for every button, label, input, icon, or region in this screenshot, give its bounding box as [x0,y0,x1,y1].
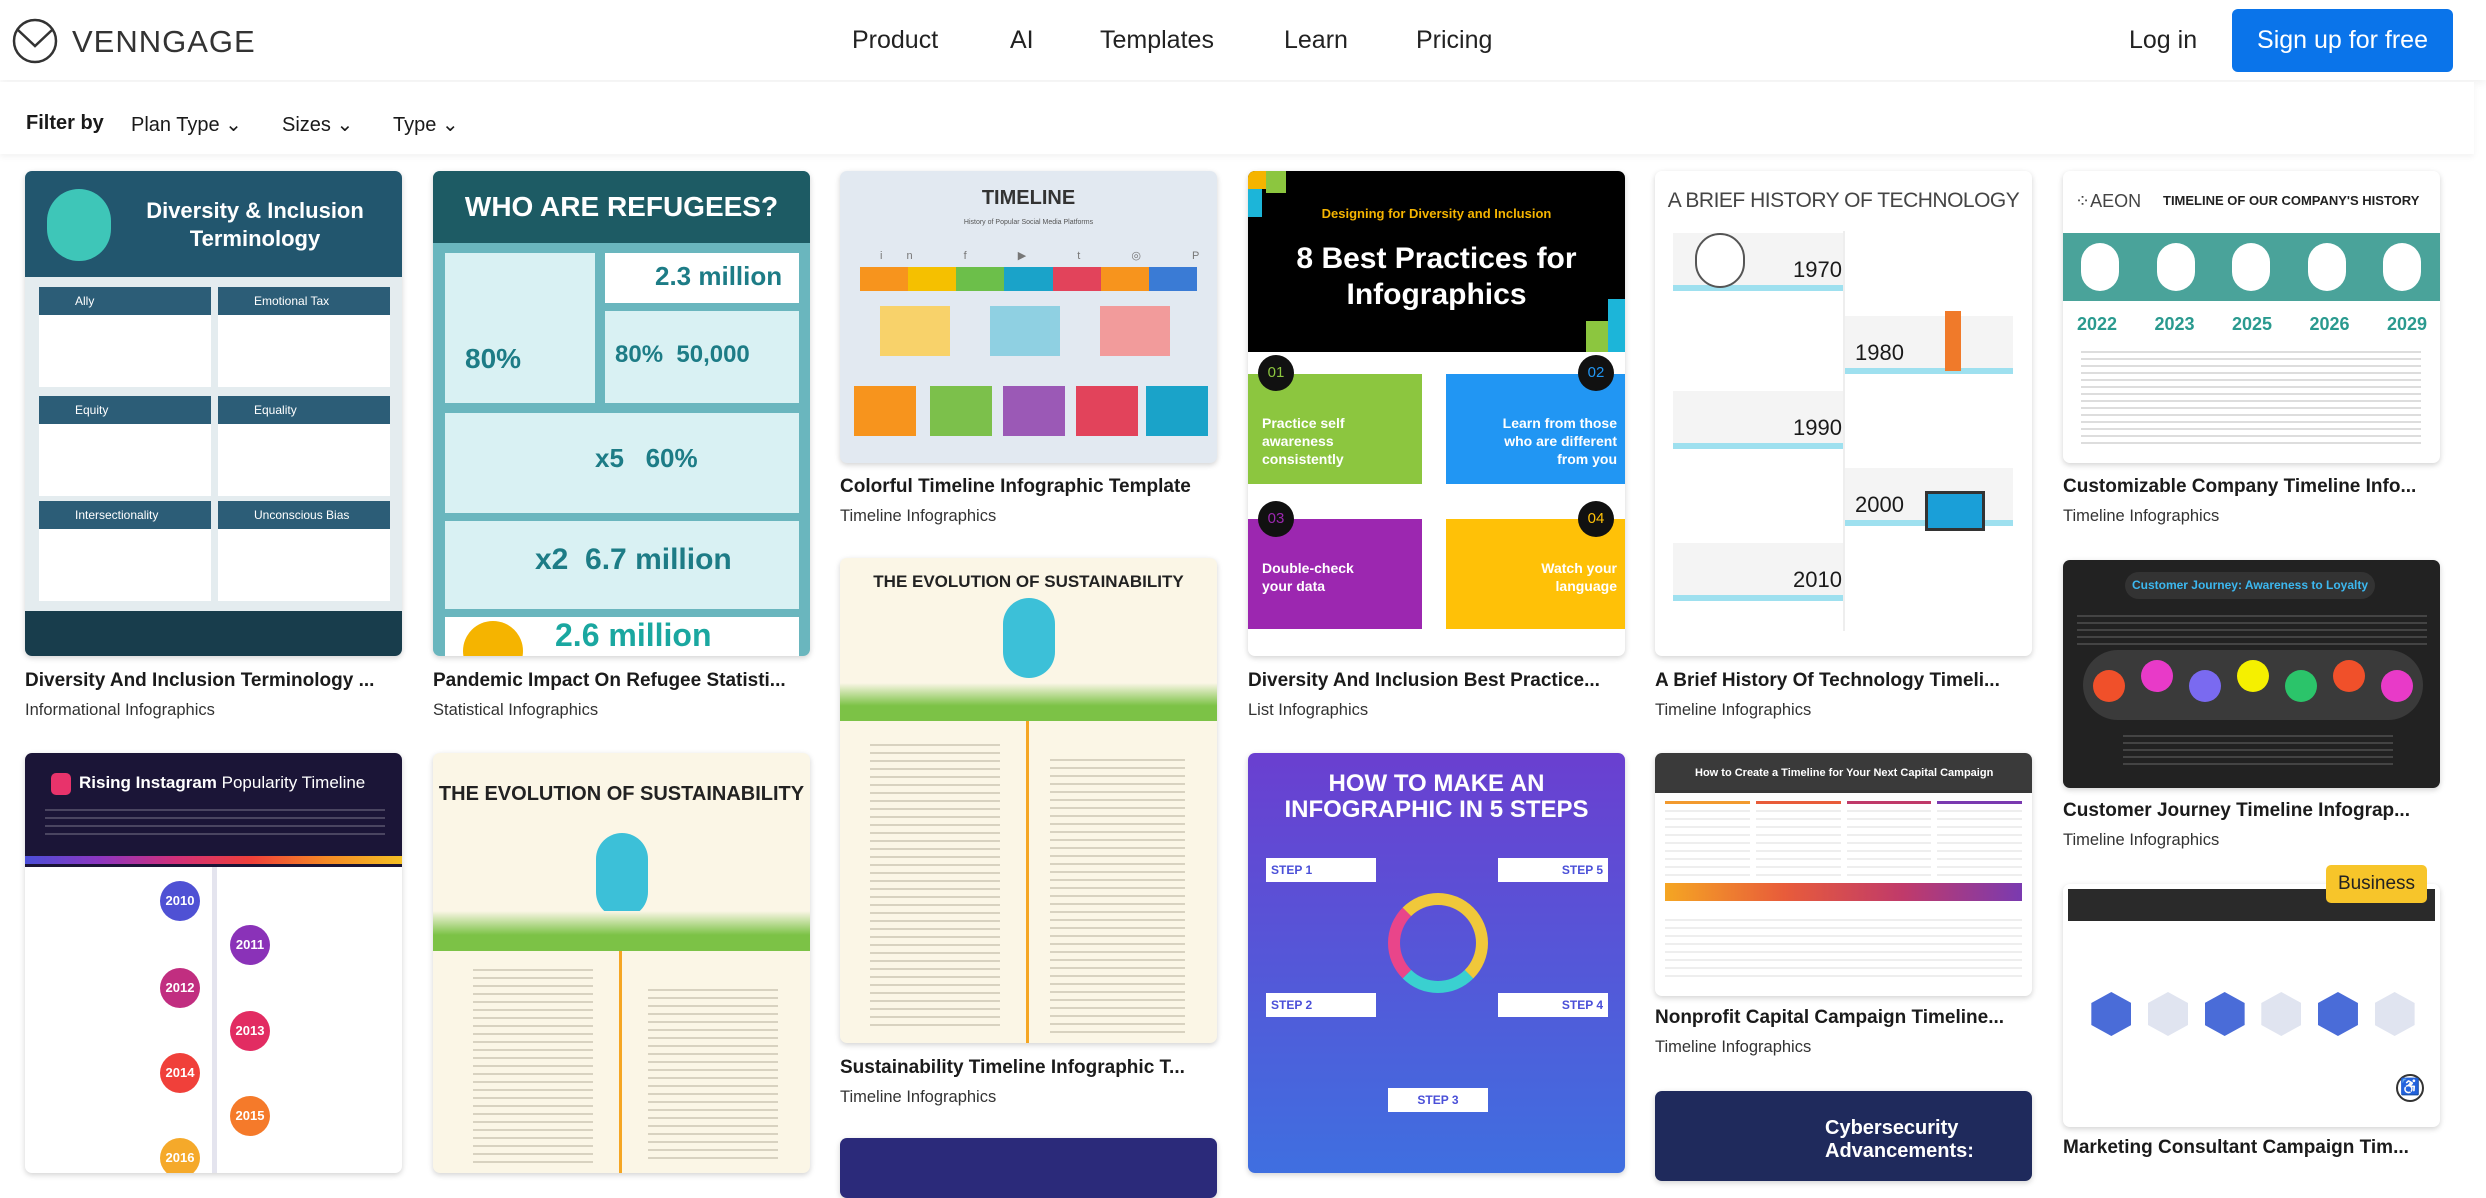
card: how to make an infographic [1248,753,1625,1173]
text: A Brief History Of Technology Timeli... [1655,670,2000,691]
card: diversity terminology: Equality [254,403,297,417]
card: AEON company timeline: 2025 [2232,314,2272,334]
card: instagram timeline: 2015 [236,1108,264,1123]
card: 8 best practices: your data [1262,578,1325,594]
text: Timeline Infographics [840,507,996,525]
card: diversity terminology: Intersectionality [75,508,158,522]
card: diversity terminology: Terminology [190,226,320,251]
card: 8 best practices: Watch your [1541,560,1617,576]
card: customer journey: Customer Journey: Awareness to Loyalty [2132,578,2368,592]
card: 8 best practices: awareness [1262,433,1334,449]
filter bar: Plan Type ⌄ [131,114,242,136]
text: Timeline Infographics [840,1088,996,1106]
card: 8 best practices: consistently [1262,451,1344,467]
text: Customizable Company Timeline Info... [2063,476,2416,497]
filter bar: Filter by [26,112,104,134]
header bar [0,0,2486,80]
card: 8 best practices [1248,171,1625,656]
card: AEON company timeline: 2023 [2154,314,2195,334]
card: 8 best practices: 8 Best Practices for [1296,242,1577,275]
card: AEON company timeline [2063,171,2440,463]
text: Sustainability Timeline Infographic T... [840,1057,1185,1078]
card: marketing consultant [2063,884,2440,1127]
text: Diversity And Inclusion Best Practice... [1248,670,1600,691]
text: Timeline Infographics [2063,507,2219,525]
text: Pandemic Impact On Refugee Statisti... [433,670,786,691]
card: 8 best practices: 01 [1268,364,1284,381]
card: 8 best practices: who are different [1504,433,1617,449]
card: brief history of technology: A BRIEF HISTORY OF TECHNOLOGY [1668,189,2019,212]
card: colorful timeline: in f ▶ t ◎ P [880,250,1217,262]
card: how to make an infographic: HOW TO MAKE AN [1328,770,1544,797]
card: 8 best practices: Infographics [1346,278,1526,311]
nav links: Pricing [1416,26,1492,54]
text: List Infographics [1248,701,1368,719]
card: diversity terminology: Emotional Tax [254,294,329,308]
card: evolution of sustainability (col 2) [433,753,810,1173]
card: brief history of technology: 1990 [1793,415,1842,440]
card: how to make an infographic: STEP 2 [1271,998,1312,1012]
card: refugees: 80% 50,000 [615,341,750,368]
text: Marketing Consultant Campaign Tim... [2063,1137,2409,1158]
card: 8 best practices: 02 [1588,364,1604,381]
filter bar: Sizes ⌄ [282,114,353,136]
card: brief history of technology [1655,171,2032,656]
card: 8 best practices: Practice self [1262,415,1344,431]
card: brief history of technology: 2010 [1793,567,1842,592]
logo [12,18,256,64]
card: instagram timeline [25,753,402,1173]
card: evolution of sustainability (col 2): THE EVOLUTION OF SUSTAINABILITY [439,783,804,805]
card: col3 bottom [840,1138,1217,1198]
text: Nonprofit Capital Campaign Timeline... [1655,1007,2004,1028]
card: how to make an infographic: STEP 4 [1562,998,1603,1012]
card: diversity terminology: Diversity & Inclusion [146,198,364,223]
card: refugees: 80% [465,343,521,374]
card: instagram timeline: 2012 [166,980,194,995]
sign up button [2232,9,2453,72]
card: 8 best practices: 03 [1268,510,1284,527]
card: diversity terminology: Unconscious Bias [254,508,349,522]
log in: Log in [2129,26,2197,54]
card: AEON company timeline: 2026 [2309,314,2350,334]
logo: VENNGAGE [72,24,256,59]
text: Diversity And Inclusion Terminology ... [25,670,374,691]
text: Timeline Infographics [1655,701,1811,719]
nav links: AI [1010,26,1034,54]
card: 8 best practices: 04 [1588,510,1604,527]
card: how to make an infographic: STEP 5 [1562,863,1603,877]
card: how to make an infographic: INFOGRAPHIC IN 5 STEPS [1284,796,1589,823]
icon: accessibility: ♿ [2400,1079,2420,1096]
card: brief history of technology: 1980 [1855,340,1904,365]
nav links [852,26,1492,54]
card: nonprofit capital campaign [1655,753,2032,996]
text: Informational Infographics [25,701,215,719]
card: brief history of technology: 2000 [1855,492,1904,517]
text: Colorful Timeline Infographic Template [840,476,1191,497]
icon: accessibility [2396,1074,2424,1102]
card: 8 best practices: from you [1557,451,1617,467]
card: customer journey [2063,560,2440,788]
card: instagram timeline: Rising Instagram Popularity Timeline [79,773,365,792]
card: sustainability timeline (col 3) [840,558,1217,1043]
card: instagram timeline: 2014 [166,1065,194,1080]
card: 8 best practices: language [1556,578,1617,594]
card: cybersecurity: Advancements: [1825,1140,1974,1162]
card: cybersecurity [1655,1091,2032,1181]
card: refugees: x2 6.7 million [535,543,732,576]
card: refugees: WHO ARE REFUGEES? [465,191,778,222]
badge: business [2326,865,2427,903]
text: Timeline Infographics [1655,1038,1811,1056]
card: diversity terminology: Ally [75,294,94,308]
card: 8 best practices: Double-check [1262,560,1354,576]
card: how to make an infographic: STEP 1 [1271,863,1312,877]
nav links: Templates [1100,26,1214,54]
card: instagram timeline: 2011 [236,937,264,952]
filter bar [0,82,2474,154]
card: AEON company timeline: TIMELINE OF OUR COMPANY'S HISTORY [2163,193,2419,208]
nav links: Learn [1284,26,1348,54]
card: diversity terminology [25,171,402,656]
card: 8 best practices: Designing for Diversity and Inclusion [1322,206,1551,221]
card: sustainability timeline (col 3): THE EVOLUTION OF SUSTAINABILITY [873,572,1184,591]
card: colorful timeline: TIMELINE [982,187,1075,209]
text: Customer Journey Timeline Infograp... [2063,800,2410,821]
card: AEON company timeline: ⁘AEON [2075,191,2141,211]
card: colorful timeline: History of Popular Social Media Platforms [964,219,1093,226]
card: refugees: x5 60% [595,443,698,473]
card: AEON company timeline: 2022 [2077,314,2117,334]
card: colorful timeline [840,171,1217,463]
card: instagram timeline: 2010 [166,893,194,908]
badge: business: Business [2338,873,2415,894]
filter bar: Type ⌄ [393,114,459,136]
card: cybersecurity: Cybersecurity [1825,1117,1958,1139]
card: brief history of technology: 1970 [1793,257,1842,282]
card: instagram timeline: 2013 [236,1023,264,1038]
card: 8 best practices: Learn from those [1503,415,1617,431]
card: refugees: 2.3 million [655,261,782,291]
sign up button: Sign up for free [2257,26,2428,54]
text: Timeline Infographics [2063,831,2219,849]
text: Statistical Infographics [433,701,598,719]
card: diversity terminology: Equity [75,403,108,417]
icon: logo circle [12,18,58,64]
nav links: Product [852,26,938,54]
card: instagram timeline: 2016 [166,1150,194,1165]
card: refugees [433,171,810,656]
card: refugees: 2.6 million [555,617,711,653]
card: how to make an infographic: STEP 3 [1417,1093,1459,1107]
card: nonprofit capital campaign: How to Create a Timeline for Your Next Capital Campaign [1695,767,1993,779]
card: AEON company timeline: 2029 [2387,314,2427,334]
